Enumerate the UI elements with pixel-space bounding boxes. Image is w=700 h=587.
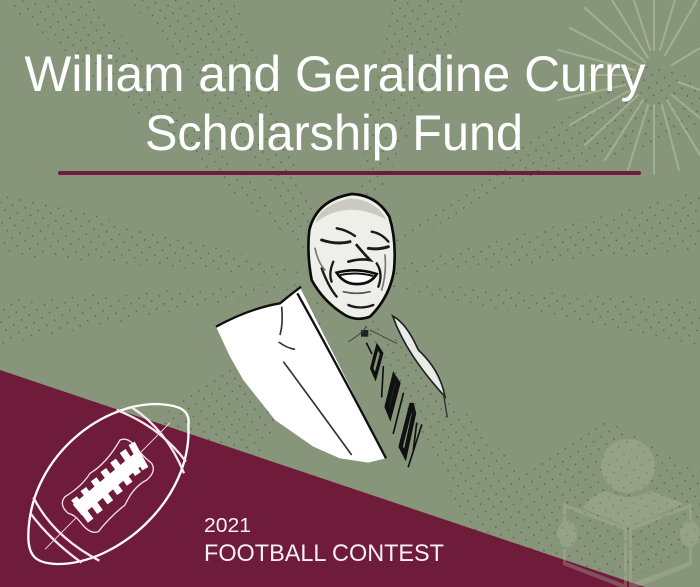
title: Scholarship Fund: [145, 105, 523, 161]
icon: person reading: [557, 439, 700, 587]
maroon corner panel: [0, 370, 645, 587]
jacket: [216, 287, 386, 463]
tie: [348, 327, 422, 467]
mouth: [337, 270, 377, 284]
contest label: 2021: [204, 515, 251, 537]
right lapel: [393, 316, 445, 397]
head: [308, 194, 395, 319]
icon: sunburst: [558, 0, 700, 174]
hair shading: [315, 198, 387, 223]
face details: [315, 228, 388, 307]
title: William and Geraldine Curry: [24, 46, 646, 102]
icon: football: [28, 404, 189, 564]
portrait illustration: [216, 194, 447, 467]
title: [24, 46, 646, 161]
contest label: FOOTBALL CONTEST: [204, 540, 444, 567]
contest label: [204, 515, 444, 567]
title divider: [58, 171, 641, 175]
